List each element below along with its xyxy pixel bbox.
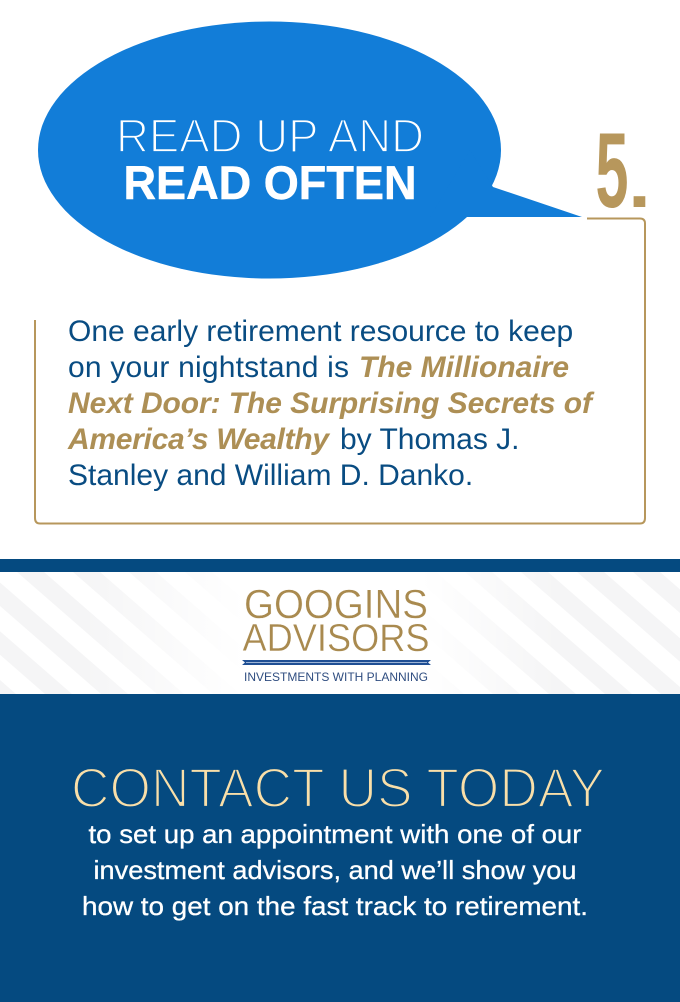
contact text: investment advisors, and we’ll show you bbox=[94, 855, 576, 885]
content frame bbox=[35, 218, 645, 524]
body text: The Millionaire bbox=[359, 351, 569, 384]
body text: by Thomas J. bbox=[340, 423, 520, 456]
bubble heading: READ OFTEN bbox=[124, 156, 416, 209]
body text: on your nightstand is bbox=[68, 351, 349, 384]
logo: INVESTMENTS WITH PLANNING bbox=[244, 670, 428, 684]
body text: One early retirement resource to keep bbox=[68, 315, 573, 348]
top navy rule bbox=[0, 559, 680, 572]
bubble heading: READ UP AND bbox=[116, 109, 424, 162]
bubble heading bbox=[116, 109, 424, 209]
contact text: to set up an appointment with one of our bbox=[88, 819, 582, 849]
body text: America’s Wealthy bbox=[67, 423, 330, 456]
speech bubble bbox=[38, 22, 582, 278]
step number: 5 bbox=[596, 110, 628, 230]
logo: GOOGINS bbox=[244, 581, 428, 627]
body text: Stanley and William D. Danko. bbox=[68, 459, 473, 492]
body text bbox=[67, 315, 595, 492]
logo: ADVISORS bbox=[242, 617, 430, 660]
body text: Next Door: The Surprising Secrets of bbox=[68, 387, 595, 420]
contact text: how to get on the fast track to retirement. bbox=[82, 891, 588, 921]
striped logo band bbox=[0, 572, 680, 694]
contact heading: CONTACT US TODAY bbox=[71, 756, 605, 819]
contact text bbox=[82, 819, 588, 921]
contact panel bbox=[0, 694, 680, 1002]
step number: . bbox=[628, 143, 651, 223]
logo bbox=[242, 581, 431, 684]
